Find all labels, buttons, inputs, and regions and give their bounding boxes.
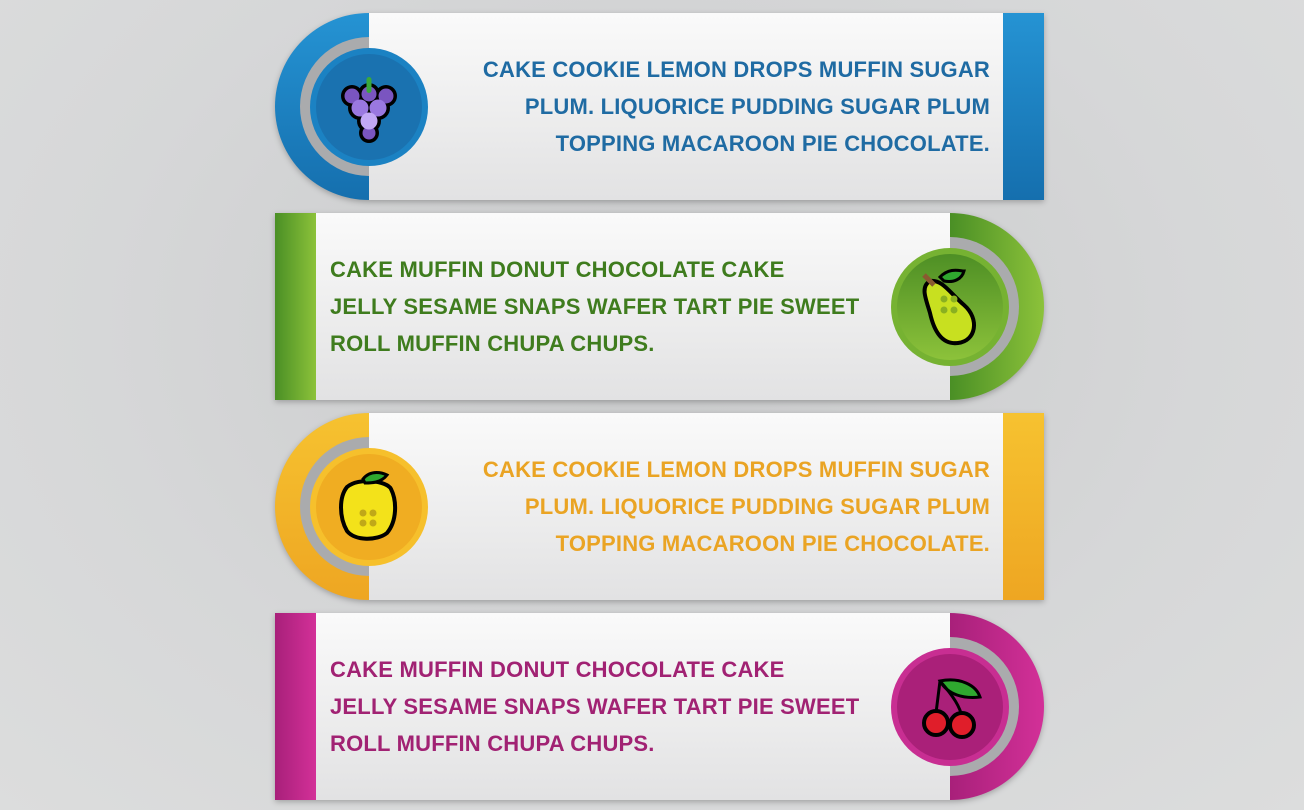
panel: yellow lemon xyxy=(272,412,1047,605)
text block: ROLL MUFFIN CHUPA CHUPS. xyxy=(330,331,655,356)
panel: green pear xyxy=(272,212,1047,405)
text block xyxy=(330,257,859,356)
text block: PLUM. LIQUORICE PUDDING SUGAR PLUM xyxy=(525,494,990,519)
text block: PLUM. LIQUORICE PUDDING SUGAR PLUM xyxy=(525,94,990,119)
text block: ROLL MUFFIN CHUPA CHUPS. xyxy=(330,731,655,756)
panel: blue grapes xyxy=(272,12,1047,205)
icon: lemon xyxy=(310,448,428,566)
panel: magenta cherries xyxy=(272,612,1047,805)
icon: pear xyxy=(891,248,1009,366)
icon: cherries xyxy=(891,648,1009,766)
text block: CAKE MUFFIN DONUT CHOCOLATE CAKE xyxy=(330,257,785,282)
text block: JELLY SESAME SNAPS WAFER TART PIE SWEET xyxy=(330,294,859,319)
text block xyxy=(330,657,859,756)
text block xyxy=(483,457,990,556)
text block: JELLY SESAME SNAPS WAFER TART PIE SWEET xyxy=(330,694,859,719)
text block: TOPPING MACAROON PIE CHOCOLATE. xyxy=(556,531,990,556)
icon: grapes xyxy=(310,48,428,166)
text block: TOPPING MACAROON PIE CHOCOLATE. xyxy=(556,131,990,156)
text block xyxy=(483,57,990,156)
text block: CAKE MUFFIN DONUT CHOCOLATE CAKE xyxy=(330,657,785,682)
text block: CAKE COOKIE LEMON DROPS MUFFIN SUGAR xyxy=(483,457,990,482)
text block: CAKE COOKIE LEMON DROPS MUFFIN SUGAR xyxy=(483,57,990,82)
